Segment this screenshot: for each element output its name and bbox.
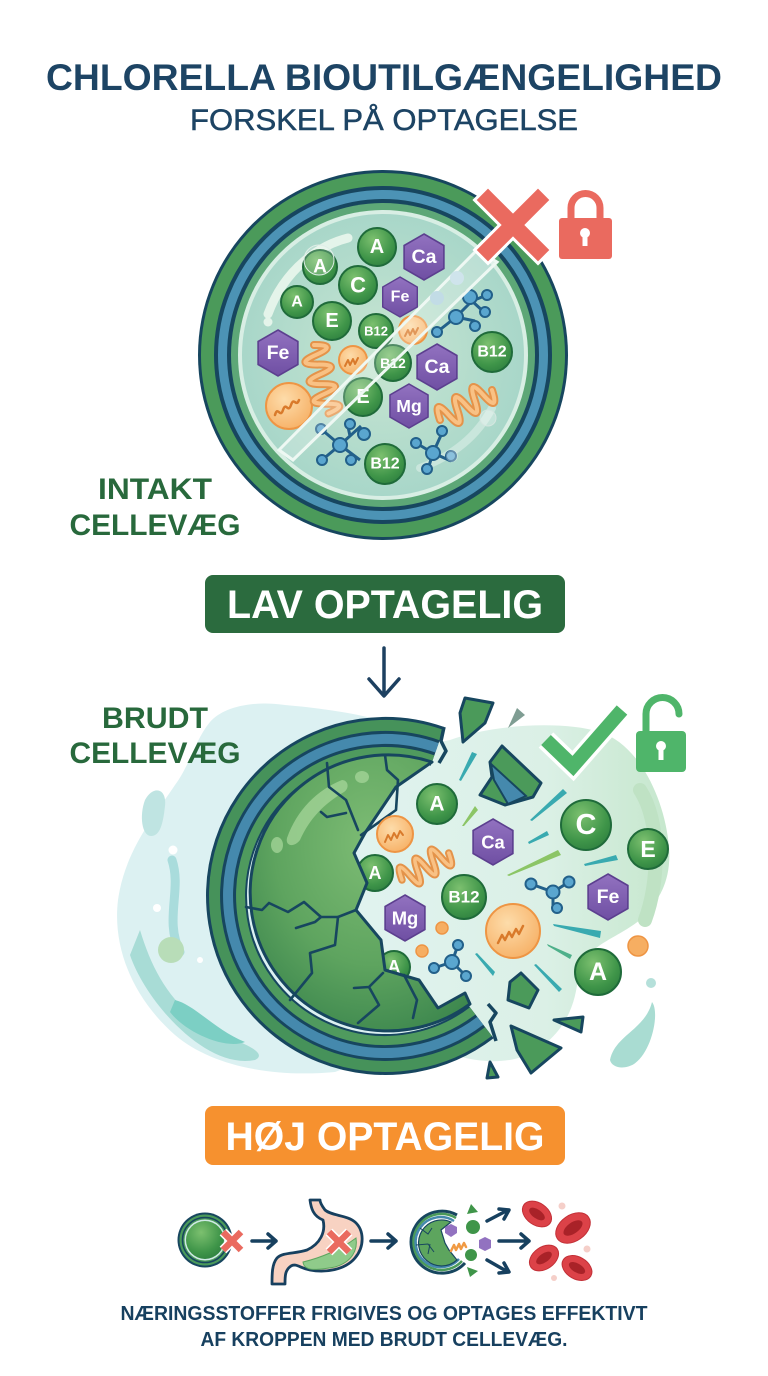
vitamin E	[344, 378, 382, 416]
mineral Mg	[385, 895, 425, 941]
mineral Ca	[404, 234, 444, 280]
label: intact cell wall: INTAKT	[98, 473, 212, 506]
vitamin B12	[365, 444, 405, 484]
orange particles	[416, 922, 648, 957]
large DNA capsule	[266, 383, 312, 429]
cracks	[246, 755, 417, 1023]
vitamin B12: B12	[477, 344, 507, 360]
subtitle: FORSKEL PÅ OPTAGELSE	[190, 104, 578, 137]
vitamin B12	[472, 332, 512, 372]
wall shard with blue layer	[480, 746, 541, 805]
vitamin A: A	[370, 236, 384, 258]
vitamin A	[303, 250, 337, 284]
molecule	[429, 940, 471, 981]
label: broken cell wall	[70, 702, 240, 770]
label: intact cell wall	[70, 473, 240, 542]
icon: open lock	[636, 698, 686, 772]
small intact cell	[178, 1212, 232, 1268]
vitamin E: E	[325, 310, 339, 332]
vitamin A	[281, 286, 313, 318]
title: CHLORELLA BIOUTILGÆNGELIGHED	[46, 57, 722, 98]
vitamin E: E	[640, 836, 656, 862]
wall shard	[554, 1017, 583, 1032]
red blood cells	[518, 1196, 596, 1286]
vitamin B12	[442, 875, 486, 919]
mineral Mg	[390, 384, 428, 428]
icon: closed lock	[559, 194, 612, 259]
caption: AF KROPPEN MED BRUDT CELLEVÆG.	[200, 1329, 568, 1351]
icon: red cross	[488, 200, 538, 250]
vitamin A: A	[313, 256, 327, 278]
vitamin A: A	[589, 958, 607, 986]
molecule	[526, 876, 574, 913]
DNA capsule	[377, 816, 413, 852]
label: intact cell wall: CELLEVÆG	[70, 509, 240, 542]
badge: high absorption	[205, 1106, 565, 1165]
broken cell illustration	[117, 698, 669, 1078]
caption	[120, 1303, 648, 1351]
vitamin A hidden: A	[368, 863, 382, 883]
cell interior	[250, 755, 470, 1031]
vitamin B12: B12	[364, 324, 388, 338]
protein squiggle	[302, 343, 340, 416]
released cloud: left	[117, 704, 420, 1073]
vitamin E	[628, 829, 668, 869]
arrows out	[487, 1209, 529, 1273]
vitamin A: A	[429, 792, 445, 816]
vitamin E: E	[356, 386, 370, 408]
vitamin A hidden: A	[388, 957, 400, 977]
mineral Fe: Fe	[597, 886, 620, 908]
vitamin C	[339, 266, 377, 304]
DNA capsule	[399, 316, 427, 344]
cell highlights	[271, 771, 369, 853]
released nutrients	[445, 1204, 491, 1277]
vitamin B12	[375, 345, 411, 381]
cell wall arc	[215, 725, 496, 1066]
arrow down	[369, 648, 399, 696]
mineral Fe	[258, 330, 298, 376]
vitamin A	[358, 228, 396, 266]
protein squiggle	[434, 380, 498, 430]
protein squiggle	[396, 843, 455, 890]
vitamin C: C	[350, 272, 366, 298]
glass shine	[279, 250, 497, 460]
mineral Ca: Ca	[481, 831, 506, 853]
arrow	[371, 1234, 396, 1248]
vitamin C: C	[576, 809, 597, 841]
arrow	[252, 1234, 276, 1248]
DNA capsule	[486, 904, 540, 958]
cloud details	[130, 790, 656, 1067]
small broken cell	[411, 1211, 465, 1273]
vitamin B12	[359, 314, 393, 348]
icon: green check	[546, 710, 622, 766]
wall shard	[508, 973, 538, 1008]
vitamin B12: B12	[380, 355, 406, 371]
vitamin B12: B12	[448, 888, 480, 906]
badge: low absorption	[205, 575, 565, 633]
caption: NÆRINGSSTOFFER FRIGIVES OG OPTAGES EFFEKTIVT	[120, 1303, 648, 1325]
label: broken cell wall: BRUDT	[102, 702, 208, 735]
vitamin A	[575, 949, 621, 995]
vitamin A	[417, 784, 457, 824]
mineral Ca: Ca	[412, 246, 437, 268]
wall shard	[460, 698, 493, 742]
DNA capsule	[339, 346, 367, 374]
intact cell illustration	[198, 170, 568, 540]
mineral Ca	[417, 344, 457, 390]
wall shard small	[508, 708, 525, 728]
vitamin B12: B12	[370, 456, 400, 472]
mineral Mg: Mg	[392, 907, 418, 929]
vitamin A hidden	[378, 951, 410, 983]
stomach	[272, 1200, 362, 1284]
fragment streaks	[459, 752, 618, 992]
badge: high absorption: HØJ OPTAGELIG	[226, 1115, 544, 1159]
vitamin A hidden	[357, 855, 393, 891]
molecule	[432, 290, 492, 337]
mineral Fe	[588, 874, 628, 920]
released cloud: right	[360, 725, 669, 1061]
molecule	[411, 426, 456, 474]
badge: low absorption: LAV OPTAGELIG	[227, 583, 543, 627]
mineral Mg: Mg	[396, 396, 422, 416]
mineral Fe	[383, 277, 417, 317]
wall shard	[511, 1026, 561, 1073]
label: broken cell wall: CELLEVÆG	[70, 737, 240, 770]
mineral Fe: Fe	[267, 342, 290, 364]
vitamin E	[313, 302, 351, 340]
molecule	[316, 419, 370, 465]
mineral Fe: Fe	[391, 288, 409, 306]
vitamin A: A	[291, 294, 303, 310]
mineral Ca	[473, 819, 513, 865]
small cross	[223, 1232, 241, 1250]
wall shard	[487, 1062, 498, 1078]
process strip	[178, 1196, 596, 1286]
mineral Ca: Ca	[425, 356, 450, 378]
stomach cross	[329, 1232, 349, 1252]
vitamin C	[561, 800, 611, 850]
